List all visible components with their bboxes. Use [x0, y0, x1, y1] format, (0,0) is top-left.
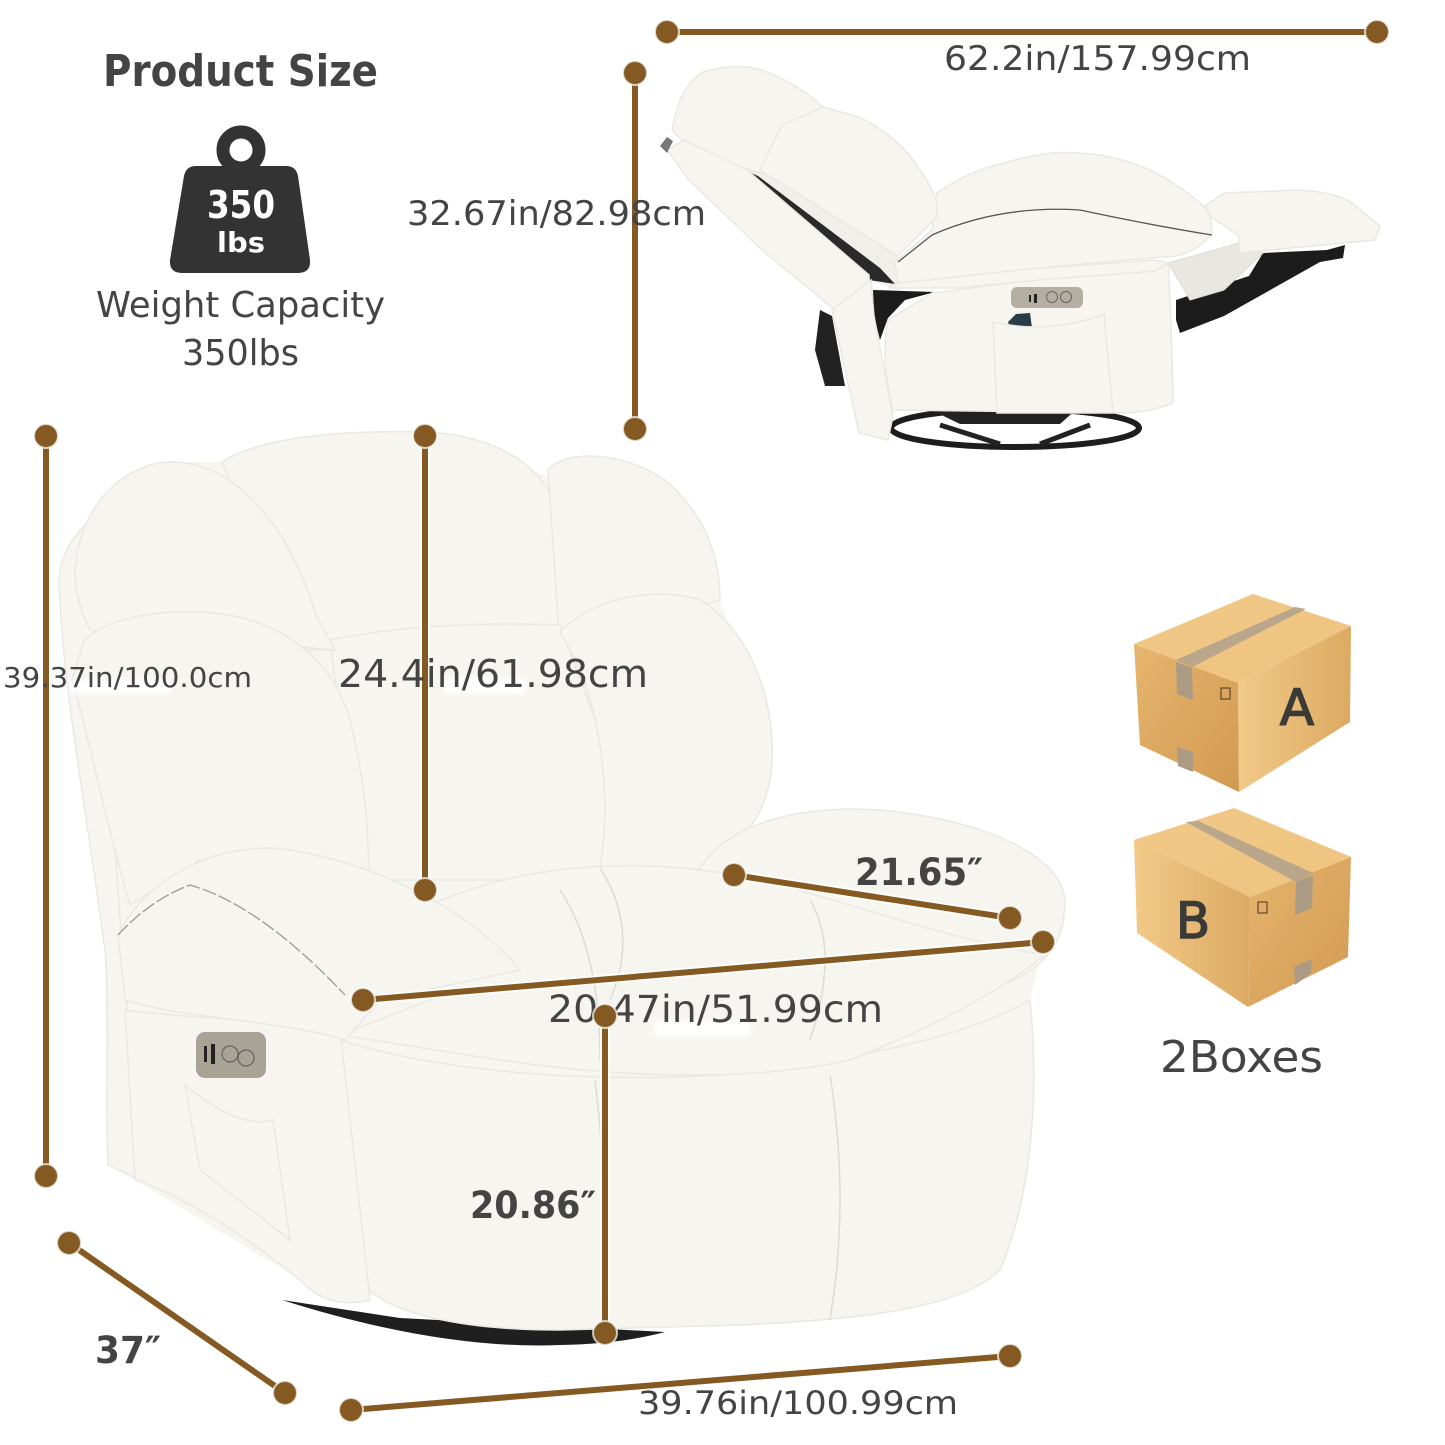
lower left cushion	[72, 612, 368, 905]
dark seam	[747, 171, 895, 284]
arrow: reclined height	[623, 61, 647, 441]
mechanism	[1176, 245, 1345, 333]
top centre cushion	[222, 432, 562, 650]
side pocket	[185, 1085, 290, 1240]
seat cushion	[340, 866, 1045, 1075]
label: seat depth: 21.65″	[855, 851, 983, 894]
arrow: chair depth	[57, 1231, 297, 1405]
swivel base shadow	[282, 1300, 665, 1345]
label: seat width: 20.47in/51.99cm	[548, 988, 883, 1031]
box B: B	[1176, 892, 1210, 950]
reclined chair	[660, 66, 1380, 447]
left arm	[118, 848, 520, 1040]
cushion flank	[747, 170, 900, 290]
label: chair width: 39.76in/100.99cm	[638, 1384, 958, 1422]
head cushion	[672, 66, 823, 175]
top right cushion	[548, 456, 720, 650]
title: Product Size	[103, 46, 378, 97]
main chair	[59, 432, 1065, 1345]
seat cushion	[895, 152, 1212, 283]
chair base	[339, 1000, 1034, 1330]
chair base	[885, 263, 1173, 413]
arrow: seat depth	[722, 863, 1022, 930]
box A	[1134, 594, 1351, 792]
weight capacity text	[96, 285, 385, 374]
rear dark frame	[815, 310, 845, 386]
back wing	[59, 520, 140, 1180]
boxes label: 2Boxes	[1160, 1032, 1323, 1083]
seat flap	[888, 260, 1168, 288]
top left cushion	[75, 462, 335, 650]
weight capacity text: Weight Capacity	[96, 285, 385, 326]
label: reclined length: 62.2in/157.99cm	[944, 39, 1251, 79]
weight capacity text: 350lbs	[182, 333, 299, 374]
chair silhouette	[60, 432, 1065, 1330]
icon: weight: 350	[207, 183, 275, 227]
control panel	[196, 1032, 266, 1078]
arrow: seat width	[351, 930, 1055, 1012]
arrow: back height	[413, 424, 437, 902]
side pocket	[993, 313, 1113, 413]
lower centre cushion	[330, 624, 610, 880]
arrow: seat height	[593, 1004, 617, 1345]
latch	[660, 137, 673, 153]
chair side panel	[125, 1010, 370, 1303]
swivel base	[891, 408, 1139, 447]
back wing	[667, 140, 870, 310]
arrow: total height	[34, 424, 58, 1188]
box B	[1134, 808, 1351, 1007]
arrow: chair width	[339, 1344, 1022, 1422]
arrow: reclined length	[655, 20, 1389, 44]
lower right cushion	[560, 594, 772, 872]
icon: weight	[170, 132, 310, 273]
back cushion	[760, 107, 937, 256]
right arm	[700, 809, 1065, 1000]
control panel	[1011, 287, 1083, 308]
ghost smudges	[70, 678, 750, 1036]
footrest fabric	[1168, 243, 1263, 300]
label: back height: 24.4in/61.98cm	[338, 652, 648, 696]
box A: A	[1280, 679, 1314, 737]
label: total height: 39.37in/100.0cm	[3, 661, 252, 694]
footrest	[1205, 190, 1380, 253]
icon: weight: lbs	[217, 226, 265, 259]
label: reclined height: 32.67in/82.98cm	[407, 194, 706, 234]
label: seat height: 20.86″	[470, 1184, 596, 1227]
label: chair depth: 37″	[95, 1329, 161, 1372]
front leg	[832, 280, 893, 440]
